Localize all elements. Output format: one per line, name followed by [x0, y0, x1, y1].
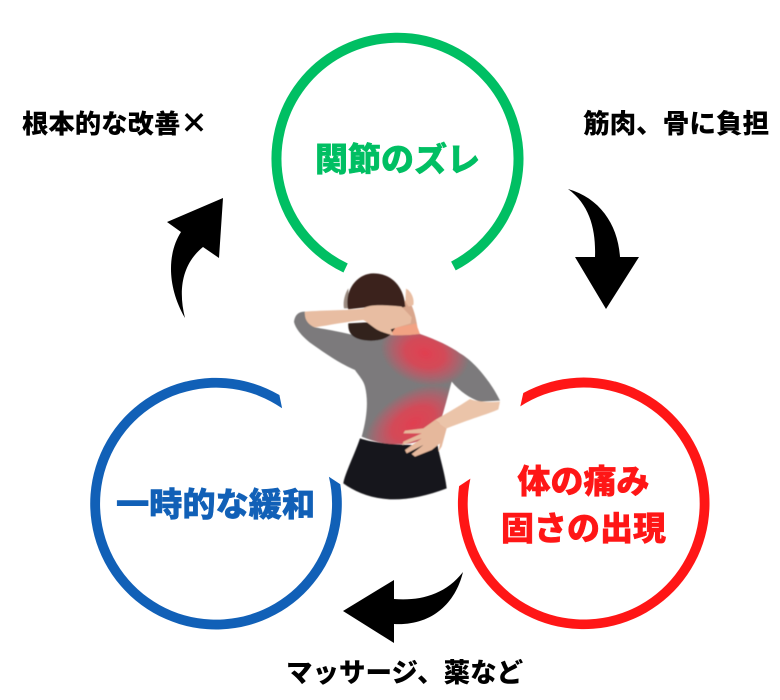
heading: pain and stiffness: [501, 463, 666, 547]
heading: joint misalignment: 関節のズレ: [315, 141, 480, 178]
torso and sleeves: [294, 312, 500, 444]
heading: temporary relief: 一時的な緩和: [116, 487, 315, 524]
arrow: up to green: [167, 198, 223, 318]
panel: red circle: [458, 378, 710, 629]
arrow: down to red: [568, 189, 639, 309]
hair below arm: [348, 322, 395, 341]
lower forearm: [435, 399, 500, 428]
label: massage, medicine: マッサージ、薬など: [286, 658, 524, 688]
label: no root improvement: 根本的な改善: [22, 109, 180, 139]
illustration: woman with back pain: [294, 273, 500, 499]
heading: pain and stiffness: 体の痛み: [518, 463, 650, 500]
arrow: left to blue: [343, 572, 463, 643]
panel: green circle: [276, 38, 518, 268]
ear: [405, 289, 414, 307]
ring: green arc: [276, 38, 518, 268]
panel: blue circle: [90, 378, 342, 629]
pain glow: [368, 334, 467, 446]
hair: [347, 273, 405, 309]
ring: blue arc: [90, 378, 342, 629]
neck: [390, 323, 420, 336]
ring: red arc: [458, 378, 710, 629]
label: no root improvement: ×: [180, 102, 208, 142]
neck side: [393, 300, 417, 332]
hand on waist: [402, 420, 447, 457]
hair fringe: [344, 288, 349, 308]
skirt: [343, 438, 447, 499]
label: muscle and bone burden: 筋肉、骨に負担: [583, 109, 769, 139]
heading: pain and stiffness: 固さの出現: [501, 510, 666, 547]
raised arm and hand: [305, 305, 412, 335]
